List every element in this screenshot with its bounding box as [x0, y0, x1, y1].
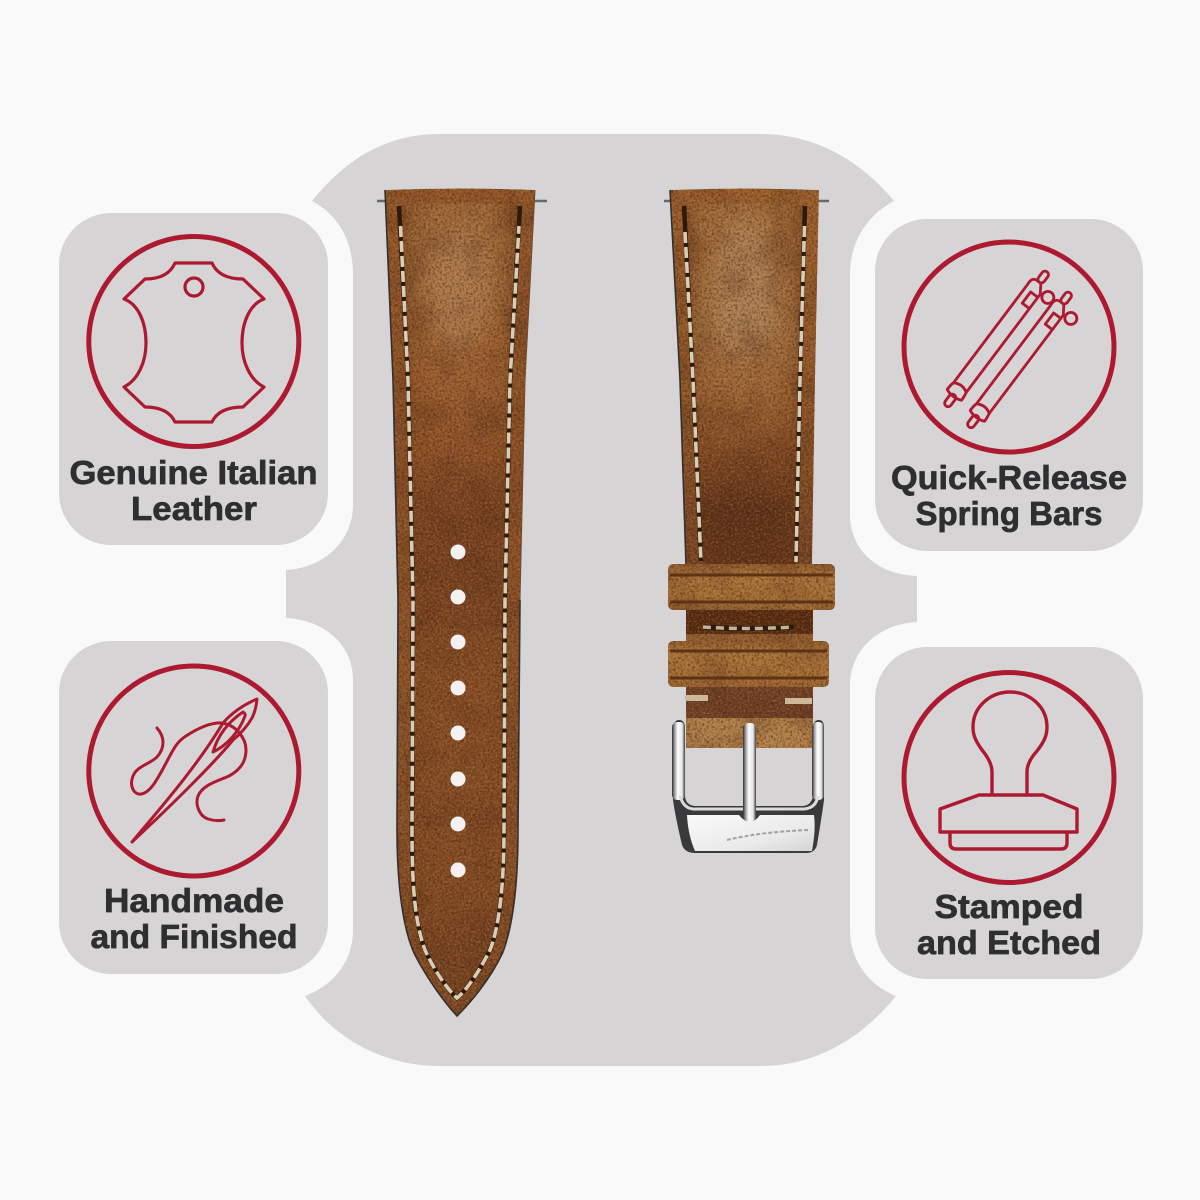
buckle engraving: [727, 830, 808, 840]
label: and Etched: [917, 924, 1101, 961]
tan leather tip: [686, 718, 813, 748]
label: Stamped: [934, 888, 1084, 925]
buckle plate: [687, 815, 815, 851]
panel: Genuine Italian Leather: [59, 213, 328, 545]
keeper one: [668, 564, 835, 610]
icon: leather hide: [89, 236, 299, 446]
buckle left post: [672, 722, 685, 800]
icon: needle and thread: [89, 666, 299, 876]
buckle frame: [673, 720, 824, 853]
long leather strap: [377, 188, 547, 1016]
keeper two: [668, 641, 829, 687]
label: Leather: [131, 490, 257, 527]
buckle pin: [743, 723, 756, 823]
spring bar tips: [377, 200, 547, 202]
icon: stamp: [904, 672, 1114, 882]
long strap right edge line: [520, 190, 535, 600]
spring bar tips: [664, 200, 829, 202]
bar two: [962, 287, 1088, 440]
short leather strap with buckle: [664, 188, 835, 853]
short strap dark edges: [670, 190, 686, 565]
long strap stitching: [399, 206, 520, 998]
icon: spring bars: [904, 242, 1114, 452]
long strap leather: [385, 188, 535, 1016]
buckle bottom highlight: [680, 796, 818, 809]
panel: Stamped and Etched: [875, 647, 1143, 979]
short strap stitching: [684, 206, 812, 701]
label: Quick-Release: [891, 459, 1127, 496]
label: Spring Bars: [916, 495, 1102, 532]
buckle: [672, 720, 824, 853]
short strap leather: [670, 188, 819, 718]
label: and Finished: [90, 918, 298, 955]
panel: Handmade and Finished: [59, 641, 328, 974]
buckle right post: [812, 722, 824, 800]
label: Genuine Italian: [70, 454, 318, 491]
long strap dark edges: [385, 190, 520, 1016]
panel: central strap backdrop: [286, 134, 917, 1066]
long strap holes: [450, 544, 466, 878]
label: Handmade: [104, 882, 284, 919]
panel: Quick-Release Spring Bars: [875, 219, 1143, 551]
bar one: [939, 266, 1065, 419]
